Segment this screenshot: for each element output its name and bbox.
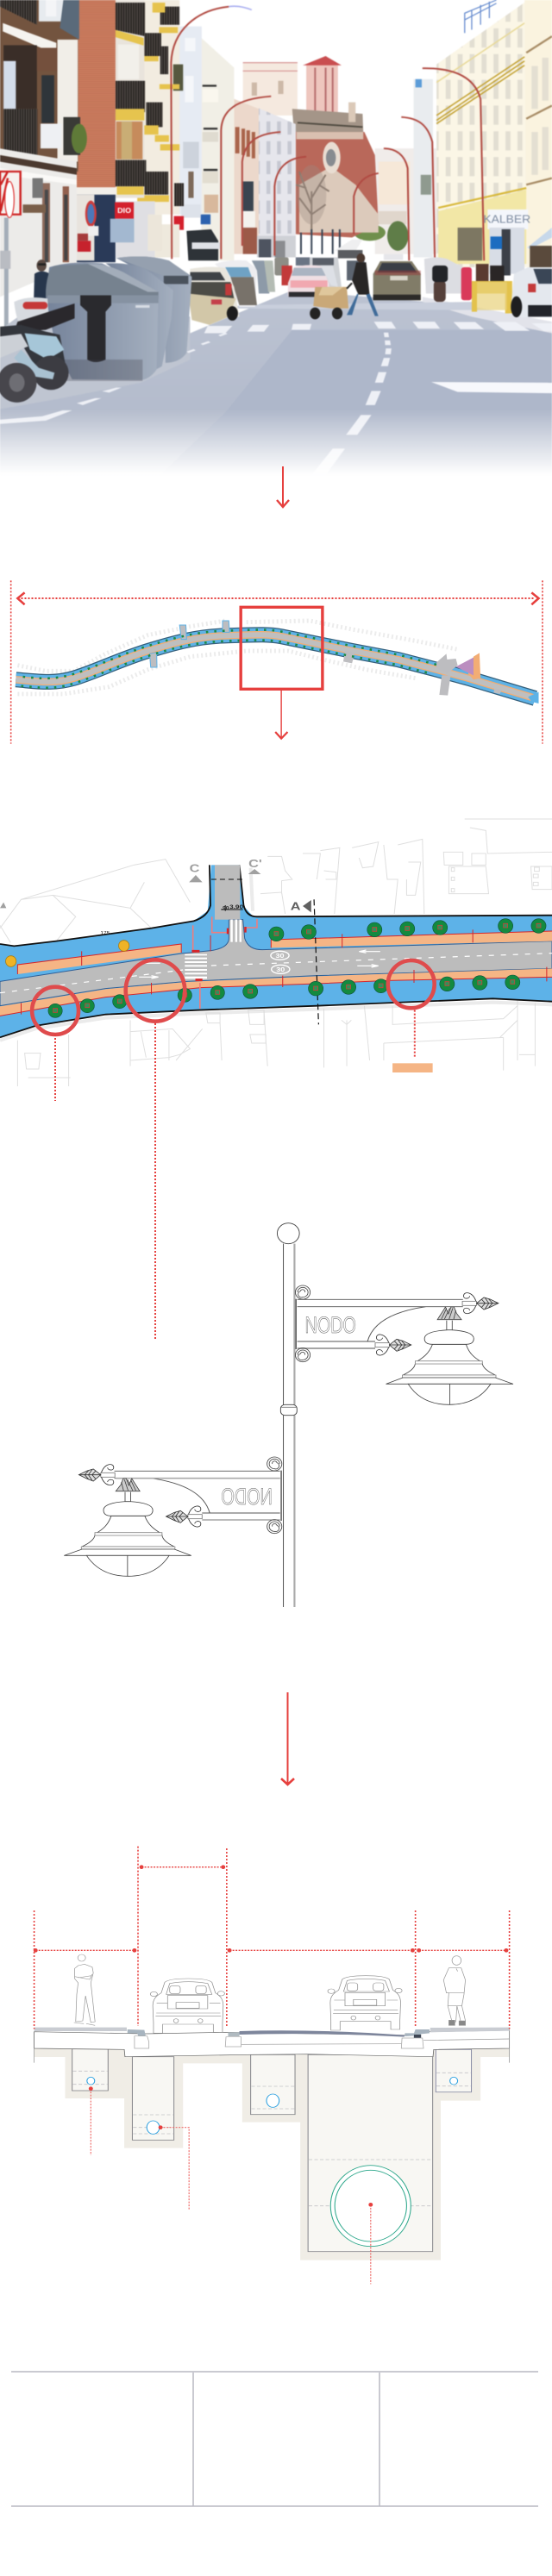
far-left building [0,0,87,327]
mid-left buildings [186,38,296,260]
speed numbers: 30 [275,953,285,960]
measurement ticks [21,929,547,1015]
side streets and squares [149,621,538,703]
cars [150,1979,224,2033]
photo: street before the works [0,0,552,517]
pavement and base slab [34,2028,510,2063]
arrow down from photo [277,466,289,507]
left lantern [64,1479,191,1576]
horizontal measures [35,1867,506,2284]
dotted lead lines from circles [55,1023,155,1340]
left lamp arm [78,1457,282,1534]
distant buildings [354,79,436,257]
measure end points [34,1865,508,2207]
section label C: C' [248,858,262,871]
speed marks [271,951,290,973]
callout lead line to swatch [414,1010,416,1058]
surrounding blocks [17,621,458,694]
kerbs and road surface [34,2028,510,2048]
section marks in side street [211,879,318,1024]
lane markings [0,950,552,993]
overview plan of the street [16,621,538,703]
right lamp arm: NODO [305,1312,356,1338]
section label C: C [190,863,200,875]
width labels: .90 [221,906,229,911]
scooters [0,297,75,403]
right lantern [386,1307,513,1404]
trees [48,919,546,1017]
red locator square and arrow [241,607,323,739]
pole [277,1223,299,1607]
right cream building [436,0,552,276]
section label A [291,900,311,913]
section label C [0,858,262,908]
road carriageway [0,920,552,1006]
utility level lines [72,2071,471,2206]
building outlines [0,819,552,1086]
bottom three-column frame [11,2372,538,2506]
trenches [72,2049,472,2252]
lane edge red lines [0,931,552,1016]
pedestrian with cart [310,253,379,319]
block shadows [0,868,552,1041]
width labels [100,903,243,936]
width labels: 3.90 [229,903,243,910]
width labels: 175 [100,931,110,936]
speed numbers: 30 [276,966,285,973]
recycling bins [46,257,191,381]
yellow fountains [6,941,129,966]
right cream building: KALBER [483,213,530,225]
vertical guides [34,1847,510,2029]
pink accessibility details [191,916,257,1009]
street cross-section [34,1954,510,2260]
parked cars on the left [188,257,289,325]
tree dots [21,630,436,688]
small pipes [87,2077,458,2134]
orange legend swatch [392,1063,433,1072]
balcony block with white and blue facade [113,0,202,218]
photo fade to white [0,409,552,475]
brick building [77,0,184,262]
left lamp arm: NODO [221,1484,273,1510]
brick building: DIO [117,206,131,215]
detailed street plan [0,819,552,1086]
red callout circles [32,960,435,1035]
orange bike lanes [0,931,552,1016]
building edge lines [0,865,552,1037]
cross-section width guides [34,1847,510,2284]
arrow down to cross-section [281,1692,294,1785]
range arrow and guides over the plan [11,580,543,744]
soil [34,2048,510,2260]
main sewer pipe [330,2166,411,2247]
street layers [16,635,535,698]
speed numbers [275,953,285,973]
street lamps [171,6,484,260]
person left [74,1954,95,2025]
person right [443,1956,466,2025]
street lamp drawing [64,1223,513,1607]
blue sidewalks [0,865,552,1037]
section label A: A [291,901,301,913]
person behind the bins [34,259,50,298]
zebra crossings [185,920,242,979]
road [0,291,552,517]
tree pits [53,923,541,1012]
cars and pedestrians on the road [282,254,552,317]
right lamp arm [295,1285,499,1362]
church [243,56,379,259]
